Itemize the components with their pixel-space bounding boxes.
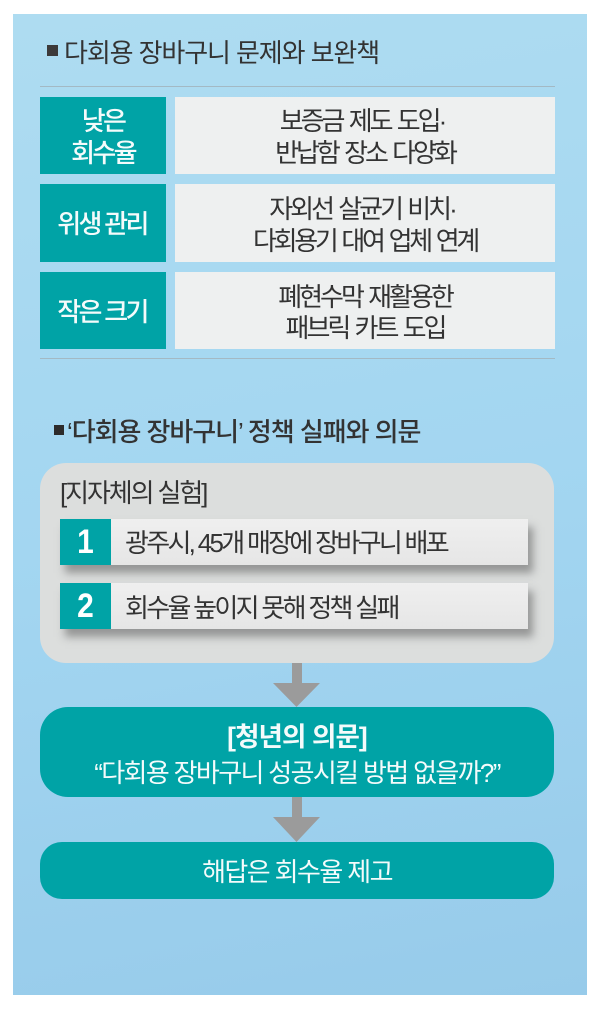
arrow: down to answer	[273, 797, 320, 842]
step number: 1	[77, 523, 94, 561]
callout: youth question	[40, 707, 554, 797]
row label	[40, 97, 166, 174]
step 2: 회수율 높이지 못해 정책 실패	[125, 593, 398, 623]
callout: answer: 해답은 회수율 제고	[202, 857, 392, 887]
row remedy	[175, 272, 555, 349]
row label: 위생 관리	[57, 209, 147, 239]
callout: youth question: [청년의 의문]	[227, 722, 367, 752]
row remedy: 보증금 제도 도입·	[280, 106, 444, 136]
row remedy: 패브릭 카트 도입	[286, 313, 444, 343]
table row: low return rate	[40, 97, 555, 174]
row label: 낮은	[82, 106, 124, 136]
row label	[40, 272, 166, 349]
row remedy: 자외선 살균기 비치·	[269, 194, 455, 224]
step 1: 광주시, 45개 매장에 장바구니 배포	[125, 528, 447, 558]
heading: policy failure and question: ‘다회용 장바구니’ 정책 실패와 의문	[67, 417, 420, 447]
row label: 회수율	[71, 138, 135, 168]
row label: 작은 크기	[57, 297, 147, 327]
callout: answer	[40, 842, 554, 899]
row remedy: 다회용기 대여 업체 연계	[253, 226, 477, 256]
step 2	[60, 583, 528, 629]
step number	[60, 583, 111, 629]
callout: youth question: “다회용 장바구니 성공시킬 방법 없을까?”	[94, 758, 500, 788]
arrow: down to question	[273, 663, 320, 707]
row remedy	[175, 184, 555, 262]
row remedy	[175, 97, 555, 174]
row remedy: 폐현수막 재활용한	[278, 282, 452, 312]
panel: local government experiment	[40, 463, 554, 663]
table row: hygiene	[40, 184, 555, 262]
table row: small size	[40, 272, 555, 349]
row label	[40, 184, 166, 262]
step number	[60, 519, 111, 565]
panel title: [지자체의 실험]	[60, 478, 206, 508]
heading: problems and remedies: 다회용 장바구니 문제와 보완책	[64, 38, 379, 68]
step number: 2	[77, 587, 94, 625]
row remedy: 반납함 장소 다양화	[275, 138, 455, 168]
step 1	[60, 519, 528, 565]
